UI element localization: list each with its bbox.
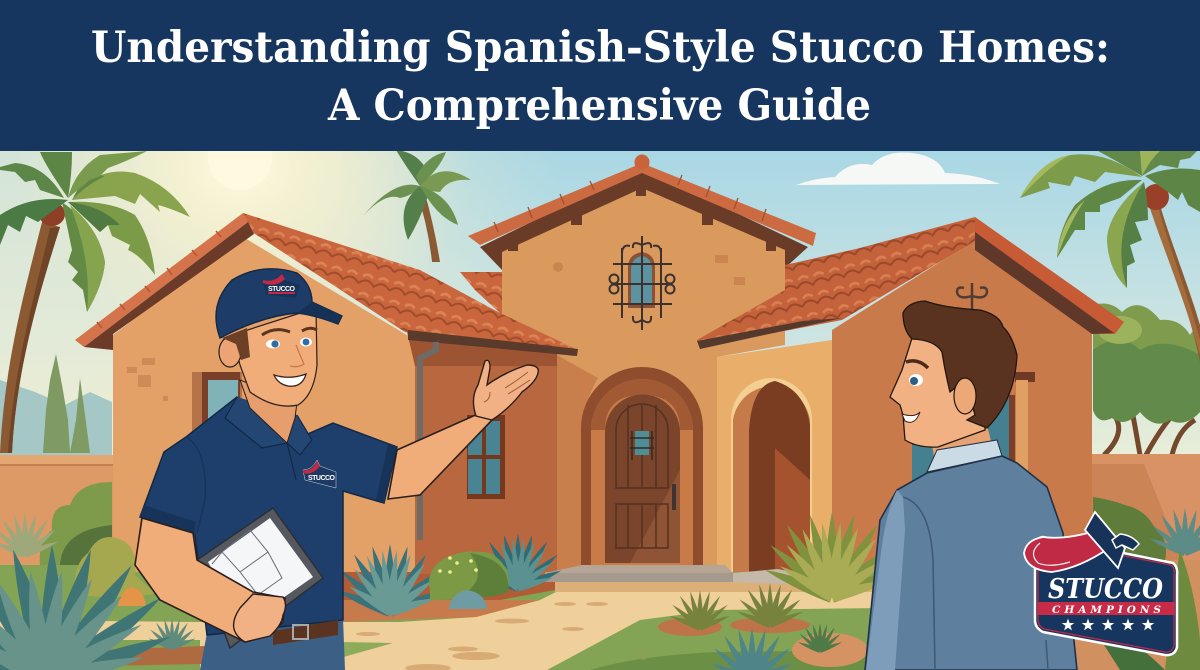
shirt collar — [927, 440, 1002, 472]
window behind worker — [192, 372, 242, 432]
orange plant — [118, 587, 146, 606]
shrub with yellow flowers — [429, 551, 509, 600]
red band — [1037, 602, 1175, 615]
neck — [240, 380, 297, 443]
palm tree: small centre — [363, 150, 471, 262]
polo shirt — [140, 397, 397, 635]
left wing walls — [113, 237, 580, 574]
open hand — [473, 360, 538, 420]
tablet with floor plan — [197, 508, 323, 648]
agave: teal behind shrub — [473, 533, 563, 597]
shirt logo: STUCCO — [308, 475, 336, 482]
title — [91, 23, 1110, 131]
rock — [449, 590, 487, 609]
sky background — [0, 0, 1200, 481]
small agave: left lawn — [148, 618, 196, 650]
wordmark: CHAMPIONS: CHAMPIONS — [1052, 604, 1161, 616]
downpipe — [420, 342, 436, 540]
palm tree: left — [0, 151, 190, 453]
title: Understanding Spanish-Style Stucco Homes: — [91, 23, 1110, 73]
gabled tile roof — [468, 155, 816, 246]
wall: light gable — [113, 237, 415, 572]
wall patch marks — [553, 255, 745, 285]
cypress trees — [43, 354, 90, 453]
side window — [912, 372, 1035, 483]
agave: faded teal right — [1148, 508, 1200, 556]
shirt logo — [303, 460, 336, 488]
palm tree: right — [1020, 151, 1200, 362]
left arm holding tablet — [135, 518, 285, 642]
client in grey-blue jacket — [865, 301, 1077, 670]
front steps — [545, 565, 807, 585]
tower decorative window — [610, 236, 674, 330]
header band — [0, 0, 1200, 151]
soffit and rafter tails — [480, 168, 808, 270]
face — [219, 308, 317, 406]
left wing roof — [75, 213, 578, 540]
rake and soffit — [975, 217, 1124, 334]
agave: teal near wall — [335, 544, 445, 622]
agave: green near arch — [763, 512, 901, 609]
tile roof — [697, 217, 985, 347]
rake tiles — [75, 213, 248, 347]
back roof section behind tower — [460, 272, 502, 315]
distant mountains — [0, 380, 112, 455]
entry wall with arched doorway — [468, 154, 832, 574]
red swoosh — [1024, 531, 1109, 572]
raised forearm — [388, 413, 492, 499]
worker in navy polo — [135, 269, 538, 670]
neck — [932, 425, 992, 462]
wordmark: STUCCO: STUCCO — [1048, 574, 1163, 605]
back garden wall: left — [0, 455, 114, 570]
jacket — [865, 456, 1077, 670]
tree: right background — [1093, 304, 1200, 455]
jeans — [200, 618, 345, 670]
cap logo: STUCCO — [268, 286, 296, 293]
trowel — [1085, 512, 1139, 568]
agave: large green behind logo — [1085, 550, 1200, 670]
wall brick marks — [127, 358, 168, 401]
small green agaves on lawn — [632, 583, 843, 660]
shrub: green left — [40, 482, 112, 565]
central tower wall — [502, 188, 785, 574]
agave: faded left — [0, 513, 59, 558]
back garden wall: right — [1092, 454, 1200, 574]
arched door surround — [581, 367, 703, 570]
right wing roof — [697, 217, 1124, 349]
stars — [1062, 618, 1154, 630]
wall: shaded section — [415, 335, 560, 574]
shrub: right of logo — [1093, 497, 1166, 560]
belt — [273, 620, 338, 645]
cloud — [796, 152, 1000, 185]
agave: large foreground — [0, 545, 174, 670]
fronds — [1020, 151, 1200, 288]
fronds — [0, 151, 190, 312]
gripping hand — [234, 594, 286, 642]
Stucco Champions logo — [1024, 512, 1177, 655]
wall — [832, 240, 1092, 572]
shield — [1035, 537, 1177, 655]
agave: blue bottom centre — [710, 628, 794, 670]
arched wooden door — [605, 395, 680, 563]
title: A Comprehensive Guide — [327, 81, 871, 131]
navy cap — [216, 269, 342, 338]
right wing walls — [832, 240, 1092, 572]
main tile roof — [243, 213, 578, 356]
right arch bay — [717, 340, 832, 572]
side window — [467, 415, 505, 499]
head — [890, 301, 1017, 447]
ground — [0, 560, 1200, 670]
iron finial — [957, 283, 987, 312]
shrub: olive left — [75, 537, 158, 597]
